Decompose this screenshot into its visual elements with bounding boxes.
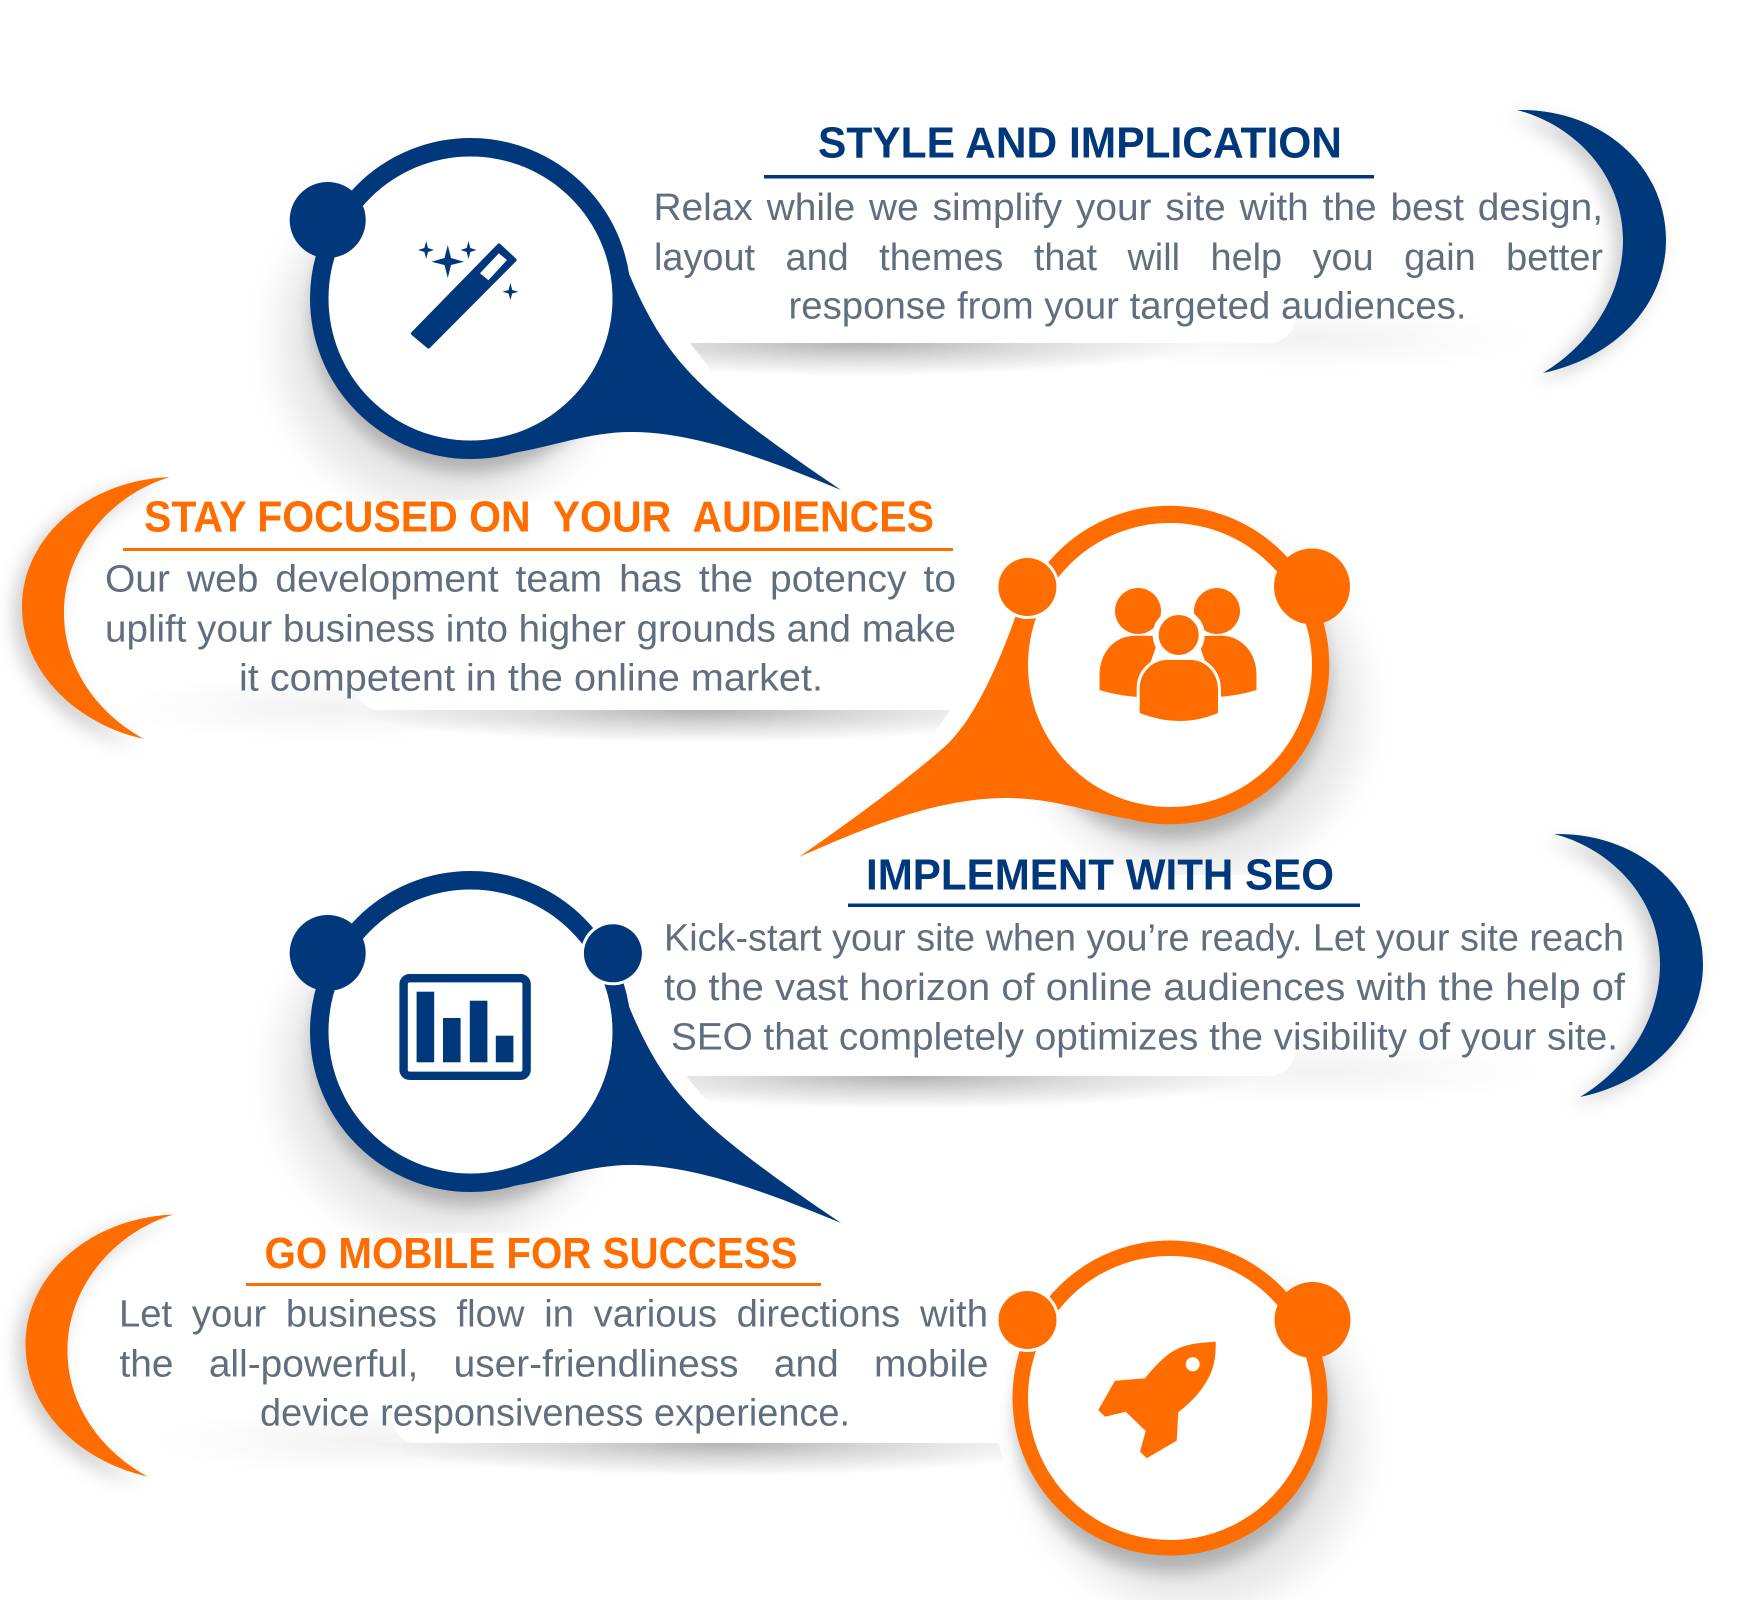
section: implement with seo <box>280 834 1703 1238</box>
panel shadow right <box>1085 304 1535 372</box>
section: style and implication <box>280 110 1666 506</box>
icon: magic wand <box>413 241 518 346</box>
heading: GO MOBILE FOR SUCCESS <box>264 1230 798 1278</box>
body text: layout and themes that will help you gain better <box>654 237 1603 279</box>
bubble shadow halo <box>280 176 610 506</box>
section: stay focused on your audiences <box>22 477 1360 872</box>
icon: rocket <box>1098 1342 1216 1458</box>
body text <box>119 1294 988 1434</box>
heading: STYLE AND IMPLICATION <box>818 120 1342 168</box>
crescent <box>1554 834 1703 1097</box>
body text: SEO that completely optimizes the visibility of your site. <box>671 1016 1618 1058</box>
body text: the all-powerful, user-friendliness and mobile <box>120 1344 988 1386</box>
body text: it competent in the online market. <box>239 658 823 700</box>
icon: people <box>1100 588 1256 721</box>
body text: Kick-start your site when you’re ready. Let your site reach <box>664 918 1624 960</box>
panel shadow <box>686 1076 1215 1105</box>
icon: bar chart <box>404 978 527 1076</box>
body text: to the vast horizon of online audiences with the help of <box>664 967 1625 1009</box>
body text: Our web development team has the potency to <box>105 558 956 600</box>
speech bubble <box>290 880 841 1223</box>
bubble shadow halo <box>280 908 610 1238</box>
white text panel <box>660 110 1295 343</box>
bubble shadow halo <box>1030 542 1360 872</box>
white text panel <box>357 500 967 710</box>
body text: response from your targeted audiences. <box>788 286 1466 328</box>
bubble shadow <box>312 892 626 1206</box>
body text: Let your business flow in various directions with <box>119 1294 988 1336</box>
section: go mobile for success <box>26 1214 1360 1600</box>
panel shadow left <box>120 674 540 742</box>
speech bubble <box>290 148 841 490</box>
white text panel <box>660 875 1295 1076</box>
panel shadow <box>396 710 950 739</box>
ring with dots <box>996 1248 1350 1548</box>
body text <box>105 558 956 700</box>
speech bubble <box>799 514 1350 857</box>
crescent <box>22 477 170 739</box>
bubble shadow <box>312 158 626 472</box>
panel shadow left <box>150 1407 590 1475</box>
panel shadow <box>416 1443 1002 1472</box>
bubble shadow <box>1015 525 1329 839</box>
body text <box>654 187 1603 328</box>
heading underline <box>123 548 953 551</box>
body text <box>664 918 1625 1058</box>
panel shadow right <box>1095 1037 1545 1105</box>
crescent <box>1517 110 1666 373</box>
body text: uplift your business into higher grounds and make <box>105 608 956 650</box>
heading: STAY FOCUSED ON YOUR AUDIENCES <box>144 494 934 542</box>
body text: device responsiveness experience. <box>260 1392 850 1434</box>
white text panel <box>394 1233 999 1443</box>
body text: Relax while we simplify your site with the best design, <box>654 187 1603 229</box>
heading underline <box>848 904 1360 907</box>
crescent <box>26 1214 174 1476</box>
panel shadow <box>690 343 1166 372</box>
heading underline <box>764 175 1374 178</box>
heading underline <box>246 1283 821 1286</box>
bubble shadow <box>1015 1258 1329 1572</box>
heading: IMPLEMENT WITH SEO <box>866 852 1334 900</box>
bubble shadow halo <box>1030 1275 1360 1600</box>
